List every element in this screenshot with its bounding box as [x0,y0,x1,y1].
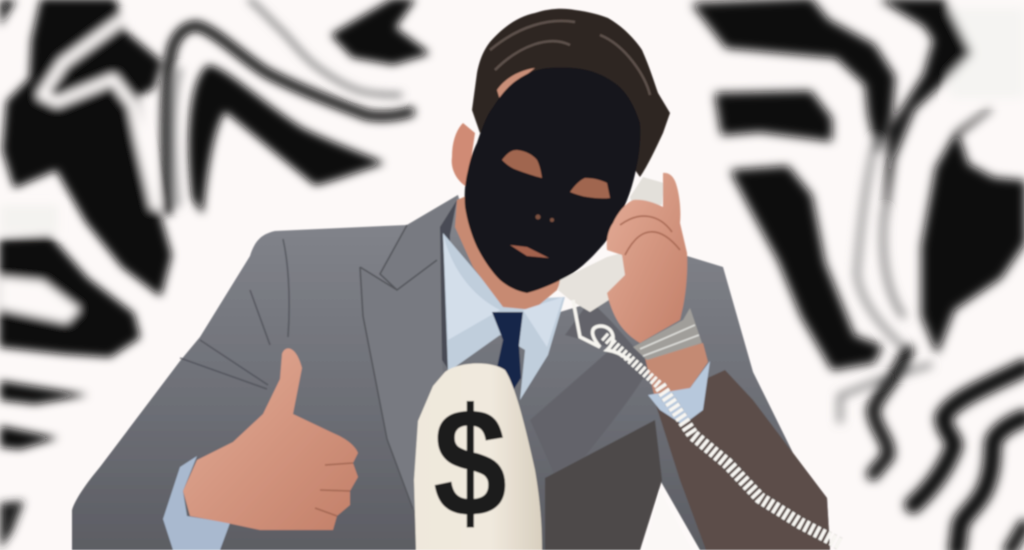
right lapel [530,300,650,487]
suit jacket [72,195,830,550]
shirt cuff left [163,456,230,550]
background: right black swirls [695,0,1024,550]
left eye hole [502,150,542,178]
right forearm sleeve [655,370,830,550]
dollar sign: $ [433,376,507,549]
black mask [465,67,640,293]
left lapel [360,195,458,520]
neck [455,190,570,310]
finger creases [620,216,680,255]
ear [452,123,475,187]
watch links [640,325,699,356]
hand on phone [607,173,687,343]
jacket pocket [545,420,662,550]
shirt [443,233,565,400]
hair [472,9,670,177]
mouth hole [510,245,549,258]
right eye hole [570,178,610,198]
shirt cuff right [648,361,710,425]
wrist [645,343,708,398]
inner shadow of jacket collar [440,200,457,372]
forehead skin [497,68,535,100]
nose holes [536,214,554,222]
finger creases [315,463,353,516]
left lapel edge [360,225,437,509]
background: left black swirls [0,0,427,549]
phone handset [558,177,664,312]
phone cord [573,300,840,544]
man [72,9,840,550]
gap behind arm with glass [645,490,692,550]
thumbs-up hand [183,348,358,530]
shirt collar [443,233,563,347]
hair highlights [490,21,650,95]
left arm creases and seam [180,239,289,389]
money bag [414,363,542,550]
tie [492,312,523,392]
wristwatch [633,308,702,360]
